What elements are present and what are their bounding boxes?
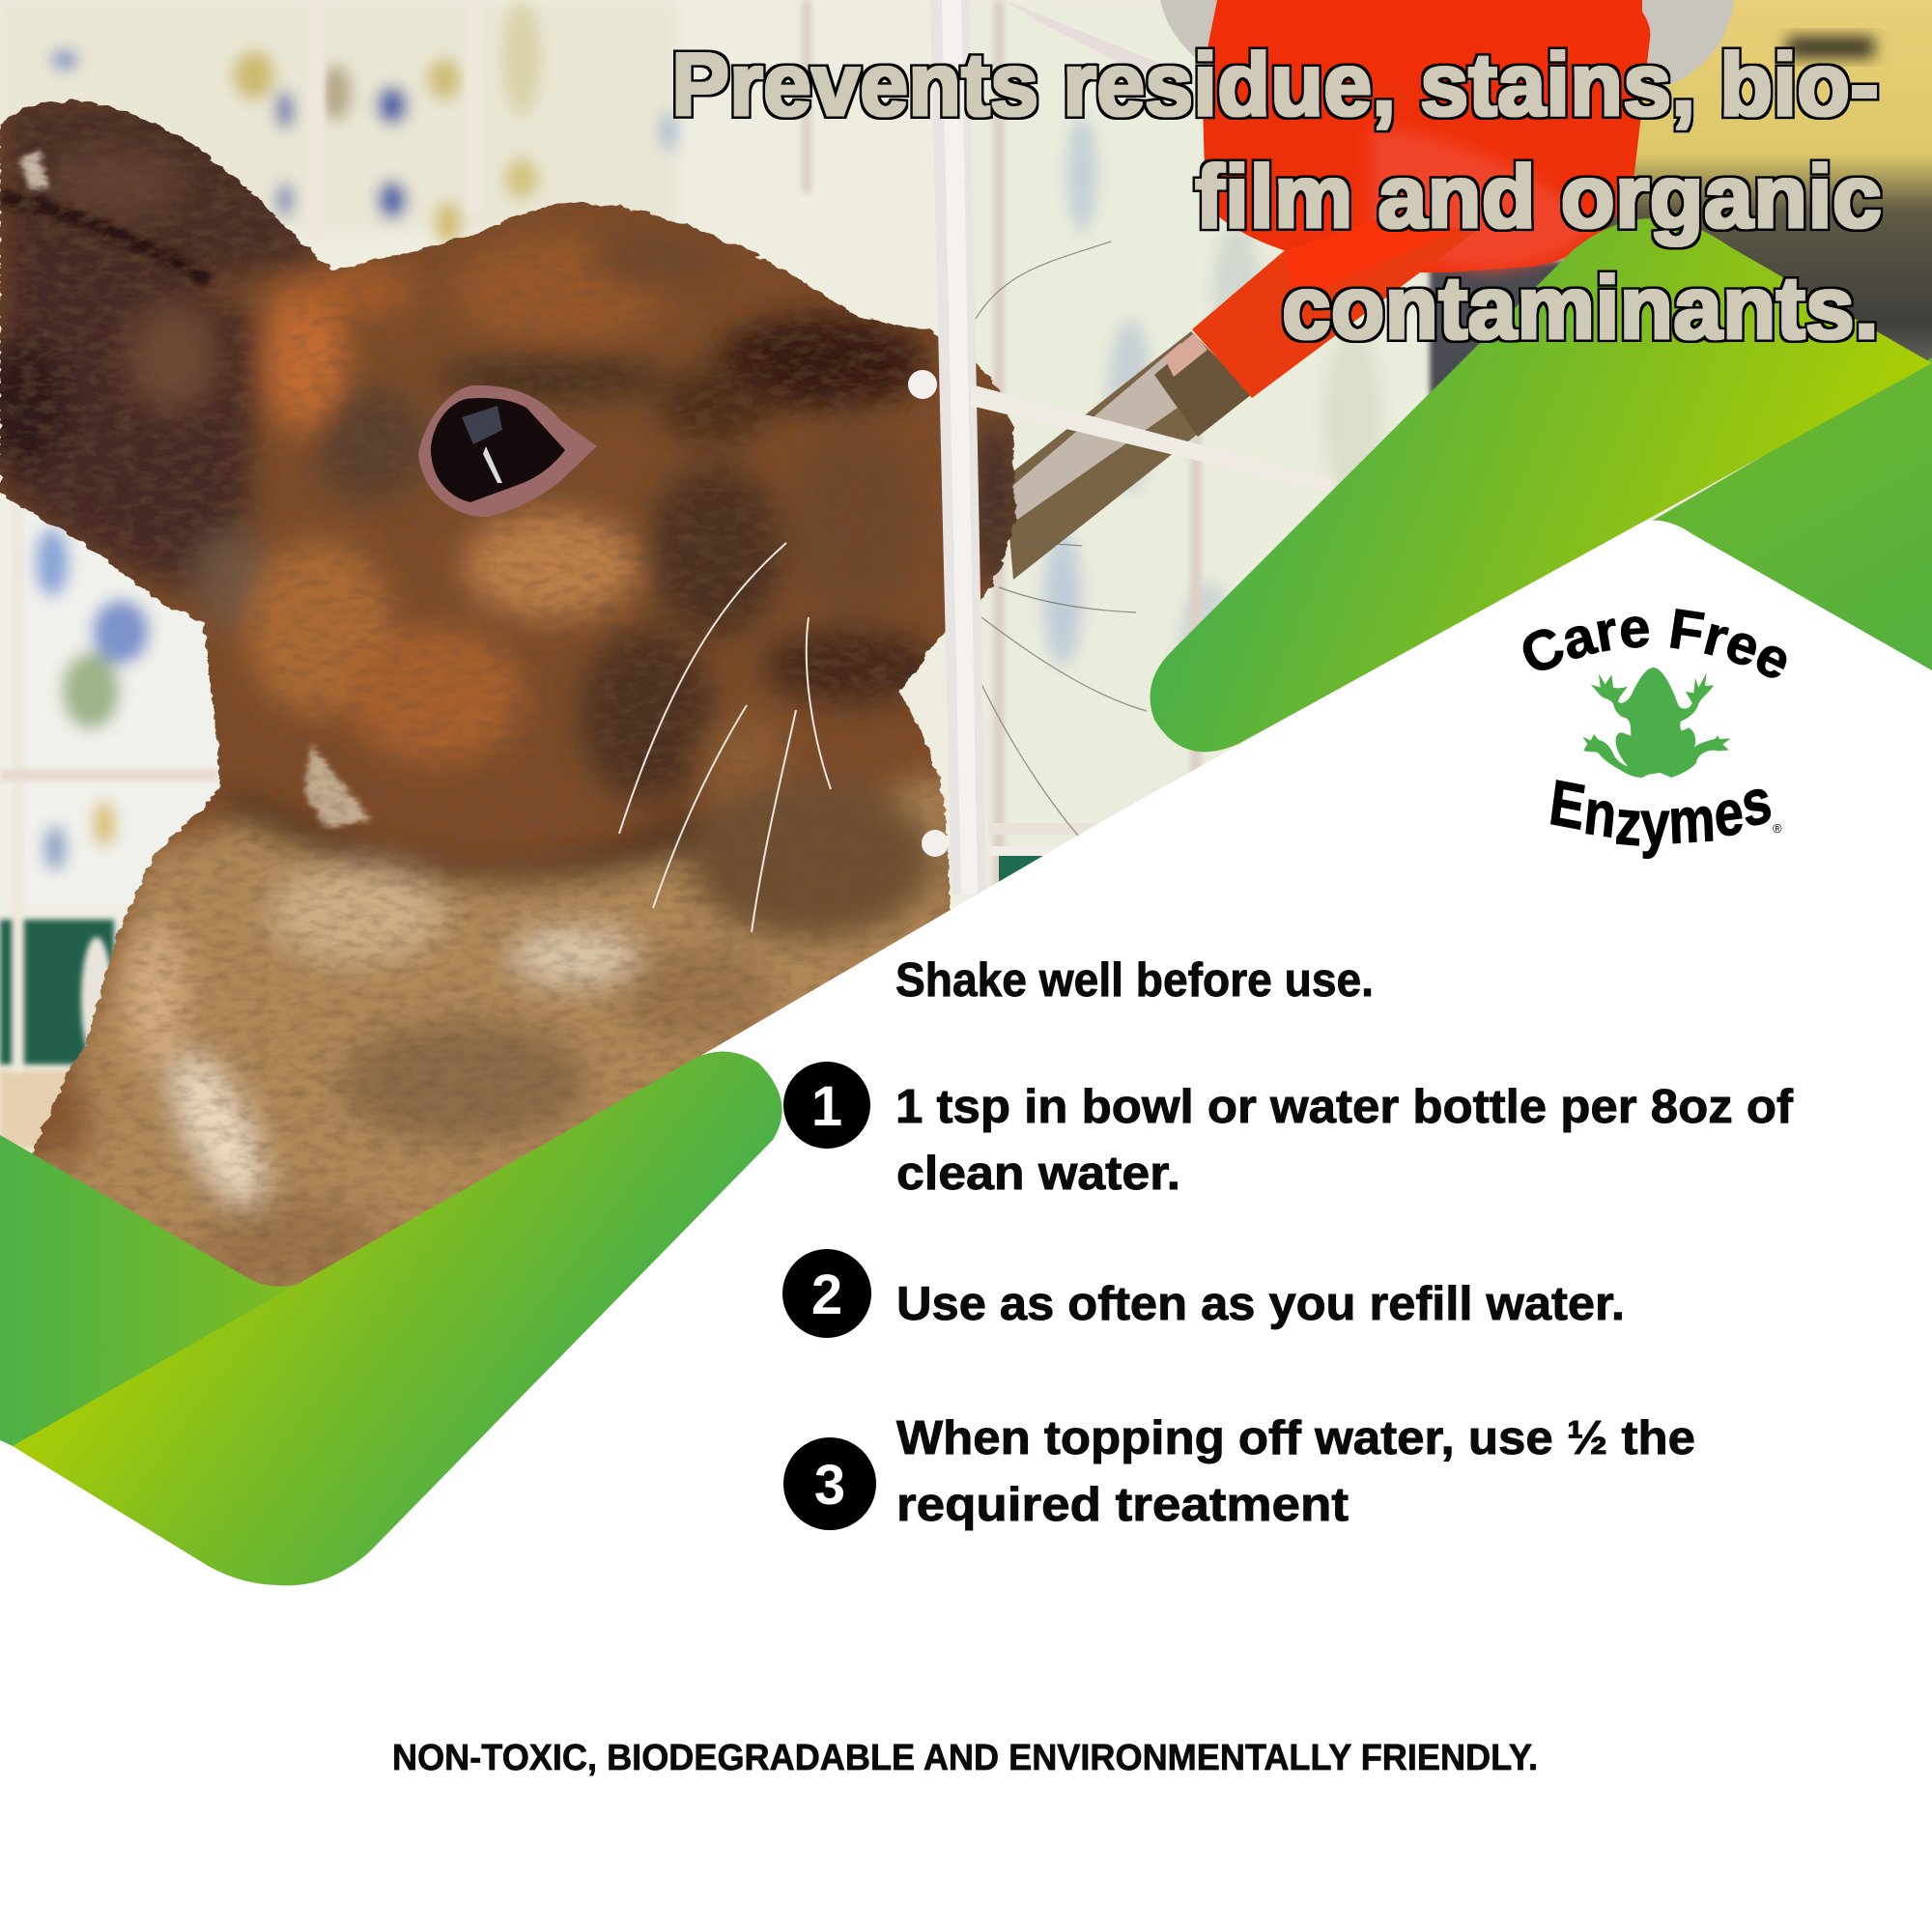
white panel [0, 521, 1932, 1932]
eye [418, 385, 597, 517]
step 1: 1 tsp in bowl or water bottle per 8oz of [895, 1081, 1794, 1133]
eye darks [314, 386, 430, 502]
cheek [647, 464, 782, 638]
green chevron: bottom left [0, 1051, 782, 1585]
registered mark: ® [1773, 821, 1782, 836]
logo: Care Free Enzymes [1522, 609, 1787, 860]
heading: Prevents residue, stains, bio- [671, 36, 1879, 134]
rabbit [0, 99, 1017, 1287]
water bottle [1005, 0, 1734, 580]
red nozzle [1192, 220, 1477, 398]
left band [0, 1135, 308, 1446]
chest [32, 761, 951, 1287]
muzzle [787, 425, 923, 618]
cage wires behind rabbit [0, 0, 483, 1072]
step 3: 3 [814, 1454, 845, 1517]
heading [671, 36, 1882, 357]
green band behind white panel: top right [1584, 357, 1932, 696]
red cup [1203, 0, 1650, 272]
green chevron: top left band [1150, 218, 1932, 752]
step 1 [783, 1062, 1794, 1200]
orange band [264, 280, 345, 435]
forehead [454, 237, 667, 343]
logo text: Care Free: Care Free [1522, 609, 1787, 678]
instruction: shake well: Shake well before use. [895, 954, 1374, 1007]
step 1: 1 [811, 1075, 842, 1138]
heading: contaminants. [1282, 259, 1879, 357]
step 1: clean water. [896, 1148, 1180, 1200]
icon: frog [1582, 668, 1731, 778]
dark green tile [0, 920, 114, 1065]
step 3: When topping off water, use ½ the [896, 1412, 1695, 1464]
cream cloth [81, 937, 112, 1063]
step 2: Use as often as you refill water. [896, 1278, 1625, 1330]
cage wires front [908, 0, 1331, 894]
step 2 [782, 1249, 1625, 1338]
pale tuft [304, 744, 372, 826]
heading: film and organic [1195, 148, 1882, 246]
whiskers [619, 543, 831, 932]
neck shadow [222, 792, 705, 886]
pale ear patch [19, 150, 48, 188]
teal tile behind cage [999, 854, 1057, 893]
metal tube [1005, 331, 1248, 580]
footer tagline: NON-TOXIC, BIODEGRADABLE AND ENVIRONMENTALLY FRIENDLY. [392, 1738, 1538, 1778]
bottle disc [1160, 0, 1734, 89]
logo text: Enzymes: Enzymes [1546, 763, 1776, 859]
step 3 [783, 1412, 1695, 1531]
step 2: 2 [811, 1264, 842, 1326]
dark whiskers [976, 242, 1147, 850]
ears [0, 97, 332, 290]
nose top [715, 314, 927, 411]
ear crease [0, 198, 208, 280]
photo: rabbit drinking from water bottle [0, 0, 1932, 1287]
step 3: required treatment [896, 1479, 1349, 1531]
lime band [13, 1051, 782, 1585]
background right: yellow wall and dark grey [1208, 0, 1932, 406]
